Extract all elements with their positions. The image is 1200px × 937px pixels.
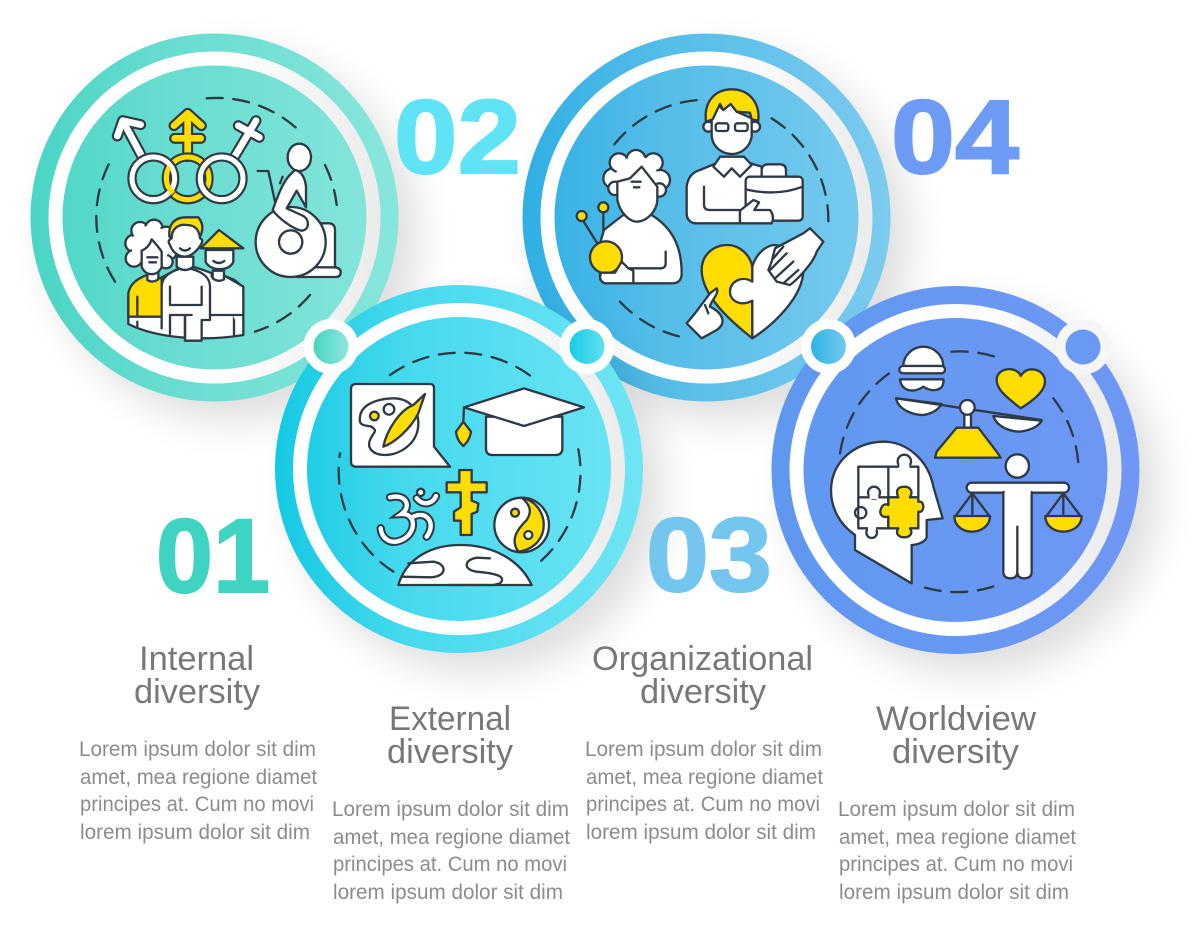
text block: internal diversity: principes at. Cum no movi [80, 793, 314, 816]
panel: worldview diversity circle [772, 286, 1159, 674]
number 03: 03 [646, 497, 772, 614]
text block: organizational diversity: amet, mea regione diamet [586, 766, 823, 789]
icon: gender symbols [117, 113, 259, 200]
text block: organizational diversity: principes at. Cum no movi [586, 793, 820, 816]
text block: internal diversity: amet, mea regione diamet [80, 766, 317, 789]
text block: external diversity: principes at. Cum no movi [333, 853, 567, 876]
icon: om symbol [381, 489, 436, 542]
text block: organizational diversity: Lorem ipsum dolor sit dim [585, 738, 822, 761]
number 01: 01 [156, 498, 270, 615]
icon: orthodox cross [447, 470, 487, 535]
icon: head with puzzle [831, 442, 943, 583]
heading: worldview diversity [876, 700, 1036, 771]
number 04: 04 [891, 79, 1019, 196]
text block: worldview diversity: Lorem ipsum dolor sit dim [838, 798, 1075, 821]
icon: puzzle heart [687, 228, 823, 338]
text block: internal diversity: lorem ipsum dolor sit dim [80, 821, 310, 844]
connector node 1 [304, 319, 358, 374]
icon: balance scale [896, 347, 1045, 458]
heading: organizational diversity [592, 640, 813, 711]
heading: organizational diversity: diversity [640, 673, 766, 711]
icon: person with scales [954, 454, 1082, 578]
icon: yin yang [494, 498, 549, 552]
heading: internal diversity [134, 640, 260, 711]
heading: organizational diversity: Organizational [592, 640, 813, 678]
heading: external diversity: External [389, 700, 511, 738]
text block: organizational diversity: lorem ipsum dolor sit dim [586, 821, 816, 844]
heading: internal diversity: diversity [134, 673, 260, 711]
heading: external diversity: diversity [387, 733, 513, 771]
text block: external diversity: lorem ipsum dolor sit dim [333, 881, 563, 904]
heading: internal diversity: Internal [139, 640, 254, 678]
panel: organizational diversity circle [522, 34, 910, 421]
connector node 4 [1056, 320, 1110, 374]
connector node 2 [560, 319, 614, 374]
text block: organizational diversity [585, 738, 823, 844]
panel: internal diversity circle [30, 34, 418, 421]
text block: internal diversity: Lorem ipsum dolor sit dim [79, 738, 316, 761]
heading: external diversity [387, 700, 513, 771]
text block: worldview diversity: lorem ipsum dolor sit dim [839, 881, 1069, 904]
connector node 3 [801, 319, 856, 374]
text block: worldview diversity [838, 798, 1076, 904]
text block: external diversity: amet, mea regione diamet [333, 826, 570, 849]
panel: external diversity circle [275, 285, 663, 673]
icon: internal diversity [96, 98, 341, 341]
icon: palette speech bubble [351, 384, 450, 467]
text block: external diversity: Lorem ipsum dolor sit dim [332, 798, 569, 821]
text block: external diversity [332, 798, 570, 904]
icon: organizational diversity [577, 89, 828, 338]
number 02: 02 [394, 79, 521, 196]
icon: man with briefcase [687, 89, 803, 223]
icon: worldview diversity [831, 347, 1082, 592]
heading: worldview diversity: Worldview [876, 700, 1036, 738]
text block: worldview diversity: amet, mea regione diamet [839, 826, 1076, 849]
icon: three people [125, 217, 243, 341]
icon: woman with yarn [577, 150, 682, 283]
text block: internal diversity [79, 738, 317, 844]
icon: wheelchair user [256, 144, 341, 277]
icon: graduation cap [456, 388, 584, 455]
text block: worldview diversity: principes at. Cum no movi [839, 853, 1073, 876]
icon: external diversity [339, 353, 584, 585]
icon: globe [398, 545, 532, 585]
heading: worldview diversity: diversity [892, 733, 1019, 771]
